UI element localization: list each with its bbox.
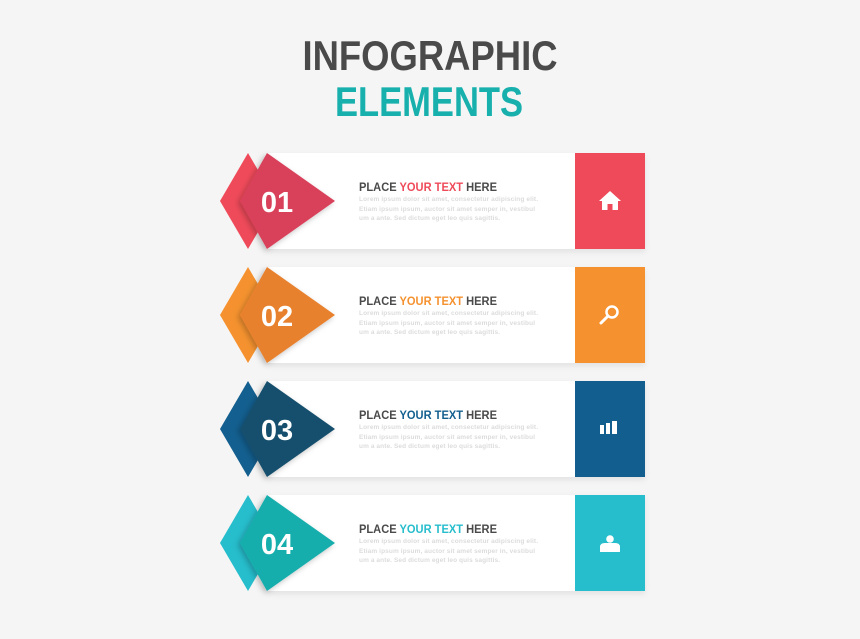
text block: um a ante. Sed dictum eget leo quis sagittis. xyxy=(359,443,500,450)
row 3 xyxy=(220,381,645,477)
text block: Lorem ipsum dolor sit amet, consectetur adipiscing elit. xyxy=(359,424,538,431)
text block: Lorem ipsum dolor sit amet, consectetur adipiscing elit. xyxy=(359,196,538,203)
title: ELEMENTS xyxy=(335,78,523,125)
text block: Lorem ipsum dolor sit amet, consectetur adipiscing elit. xyxy=(359,538,538,545)
title: INFOGRAPHIC xyxy=(302,32,558,79)
text block: PLACE YOUR TEXT HERE xyxy=(359,522,497,536)
arrow badge 04: 04 xyxy=(261,529,293,561)
text block: Etiam ipsum ipsum, auctor sit amet semper in, vestibul xyxy=(359,434,535,441)
arrow badge 02 xyxy=(220,267,335,363)
text block xyxy=(359,408,538,450)
row 2 xyxy=(220,267,645,363)
text block xyxy=(359,294,538,336)
arrow badge 02: 02 xyxy=(261,301,293,333)
text block: PLACE YOUR TEXT HERE xyxy=(359,180,497,194)
text block: um a ante. Sed dictum eget leo quis sagittis. xyxy=(359,557,500,564)
text block: um a ante. Sed dictum eget leo quis sagittis. xyxy=(359,215,500,222)
text block: Etiam ipsum ipsum, auctor sit amet semper in, vestibul xyxy=(359,548,535,555)
row 1 xyxy=(220,153,645,249)
arrow badge 01 xyxy=(220,153,335,249)
arrow badge 01: 01 xyxy=(261,187,293,219)
icon box: home xyxy=(575,153,645,249)
arrow badge 04 xyxy=(220,495,335,591)
text block: Etiam ipsum ipsum, auctor sit amet semper in, vestibul xyxy=(359,320,535,327)
arrow badge 03: 03 xyxy=(261,415,293,447)
text block xyxy=(359,180,538,222)
text block xyxy=(359,522,538,564)
icon box: user xyxy=(575,495,645,591)
row 4 xyxy=(220,495,645,591)
arrow badge 03 xyxy=(220,381,335,477)
icon box: chart xyxy=(575,381,645,477)
text block: PLACE YOUR TEXT HERE xyxy=(359,408,497,422)
title xyxy=(302,32,558,125)
text block: Lorem ipsum dolor sit amet, consectetur adipiscing elit. xyxy=(359,310,538,317)
text block: Etiam ipsum ipsum, auctor sit amet semper in, vestibul xyxy=(359,206,535,213)
text block: PLACE YOUR TEXT HERE xyxy=(359,294,497,308)
icon box: search xyxy=(575,267,645,363)
text block: um a ante. Sed dictum eget leo quis sagittis. xyxy=(359,329,500,336)
